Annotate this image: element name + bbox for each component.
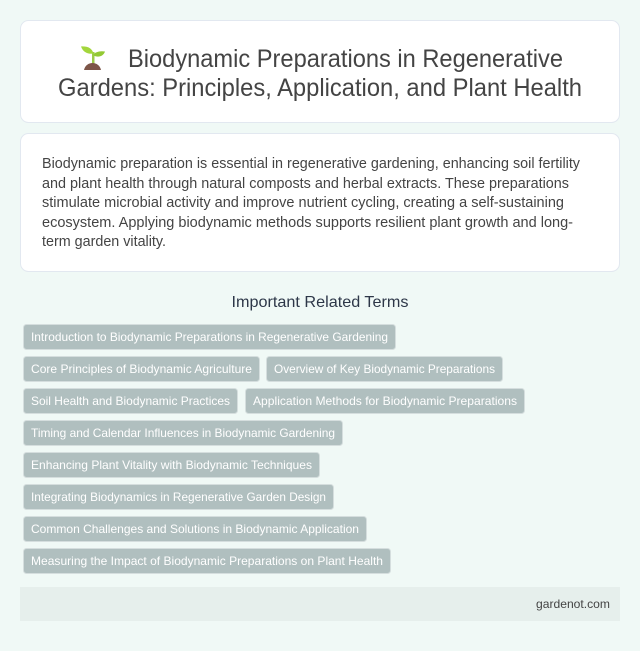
panel: description card <box>20 134 620 272</box>
tag: core principles <box>24 356 260 382</box>
panel: title card <box>20 20 620 122</box>
title: Gardens: Principles, Application, and Plant Health <box>58 74 582 102</box>
tag: measuring impact: Measuring the Impact of Biodynamic Preparations on Plant Health <box>31 554 383 568</box>
tag: soil health <box>24 388 238 414</box>
tag: application methods: Application Methods for Biodynamic Preparations <box>253 394 517 408</box>
description text: stimulate microbial activity and improve nutrient cycling, creating a self-sustaining <box>42 195 564 211</box>
tag: soil health: Soil Health and Biodynamic Practices <box>31 394 230 408</box>
tag: overview <box>266 356 502 382</box>
tag: plant vitality <box>24 452 320 478</box>
heading: important related terms: Important Related Terms <box>232 294 408 311</box>
tag: plant vitality: Enhancing Plant Vitality with Biodynamic Techniques <box>31 458 312 472</box>
tag: measuring impact <box>24 548 390 574</box>
footer: gardenot.com <box>536 597 610 611</box>
description text: and plant health through natural composts and herbal extracts. These preparations <box>42 176 569 192</box>
tag: garden design <box>24 484 334 510</box>
tag: application methods <box>246 388 524 414</box>
description text <box>42 156 581 250</box>
title <box>58 45 582 102</box>
tag: challenges: Common Challenges and Solutions in Biodynamic Application <box>31 522 359 536</box>
description text: ecosystem. Applying biodynamic methods supports resilient plant growth and long- <box>42 215 573 231</box>
title: Biodynamic Preparations in Regenerative <box>128 45 563 73</box>
tag: timing: Timing and Calendar Influences in Biodynamic Gardening <box>31 426 335 440</box>
tag: challenges <box>24 516 366 542</box>
tag: overview: Overview of Key Biodynamic Preparations <box>274 362 495 376</box>
tag: core principles: Core Principles of Biodynamic Agriculture <box>31 362 252 376</box>
tag: introduction <box>24 324 396 350</box>
description text: term garden vitality. <box>42 234 166 250</box>
related term tags <box>24 324 524 574</box>
description text: Biodynamic preparation is essential in regenerative gardening, enhancing soil fertility <box>42 156 581 172</box>
icon: seedling <box>81 46 105 70</box>
tag: introduction: Introduction to Biodynamic Preparations in Regenerative Gardening <box>31 330 388 344</box>
footer <box>20 587 620 621</box>
tag: timing <box>24 420 342 446</box>
tag: garden design: Integrating Biodynamics in Regenerative Garden Design <box>31 490 326 504</box>
